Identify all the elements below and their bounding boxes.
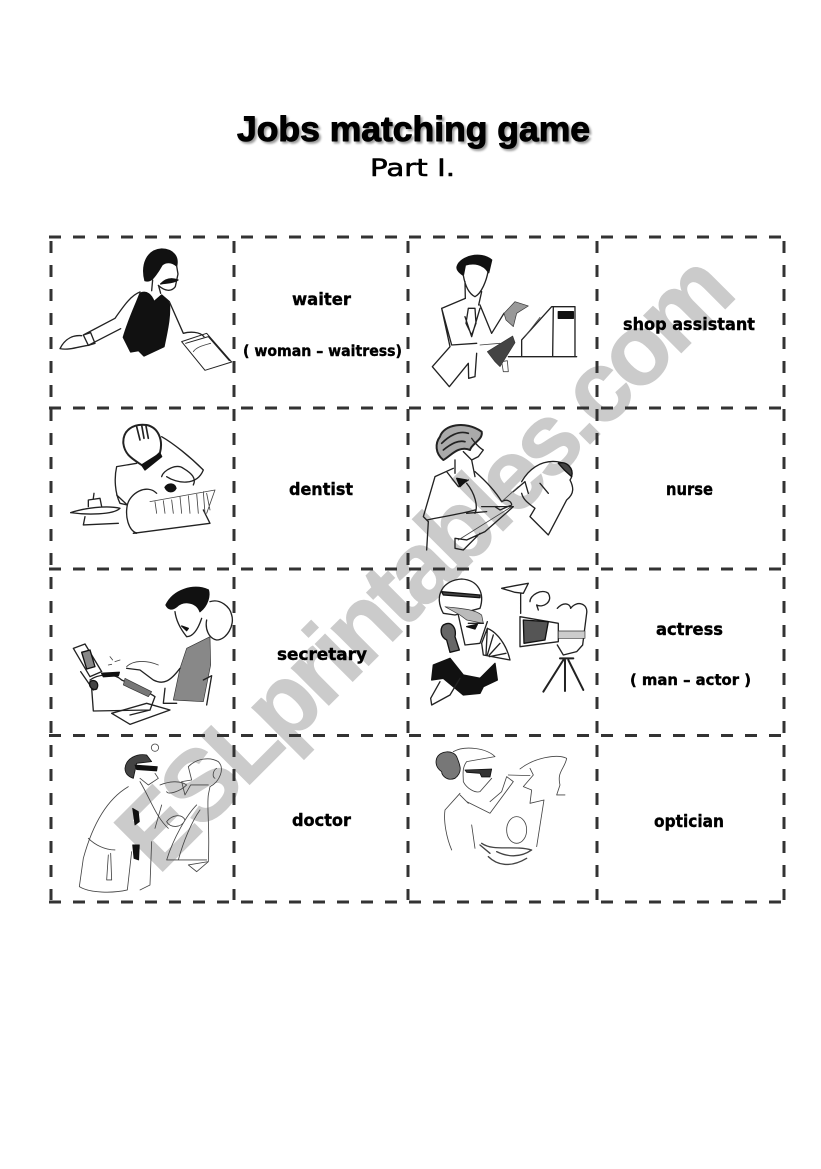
dashed card grid [49, 237, 785, 902]
illustration: shop assistant [432, 255, 577, 387]
label: dentist: dentist [289, 480, 353, 500]
title: Jobs matching game [237, 110, 590, 149]
illustration: doctor [79, 744, 221, 892]
illustration: nurse [423, 425, 573, 550]
illustration: optician [436, 748, 567, 864]
label: actress: actress [656, 620, 723, 640]
label: secretary: secretary [277, 645, 367, 665]
illustration: secretary [73, 587, 232, 724]
label: waiter: waiter [292, 290, 352, 310]
label: shop assistant: shop assistant [623, 315, 755, 335]
label: doctor: doctor [292, 811, 352, 831]
label: nurse: nurse [666, 480, 713, 500]
label: woman - waitress: ( woman – waitress) [243, 342, 402, 360]
watermark: ESLprintables.com [94, 231, 755, 892]
subtitle: Part I. [370, 154, 455, 182]
label: man - actor: ( man – actor ) [630, 671, 751, 689]
illustration: actress with film camera [431, 579, 587, 705]
illustration: dentist [71, 425, 215, 533]
label: optician: optician [654, 812, 724, 832]
illustration: waiter [60, 249, 232, 370]
